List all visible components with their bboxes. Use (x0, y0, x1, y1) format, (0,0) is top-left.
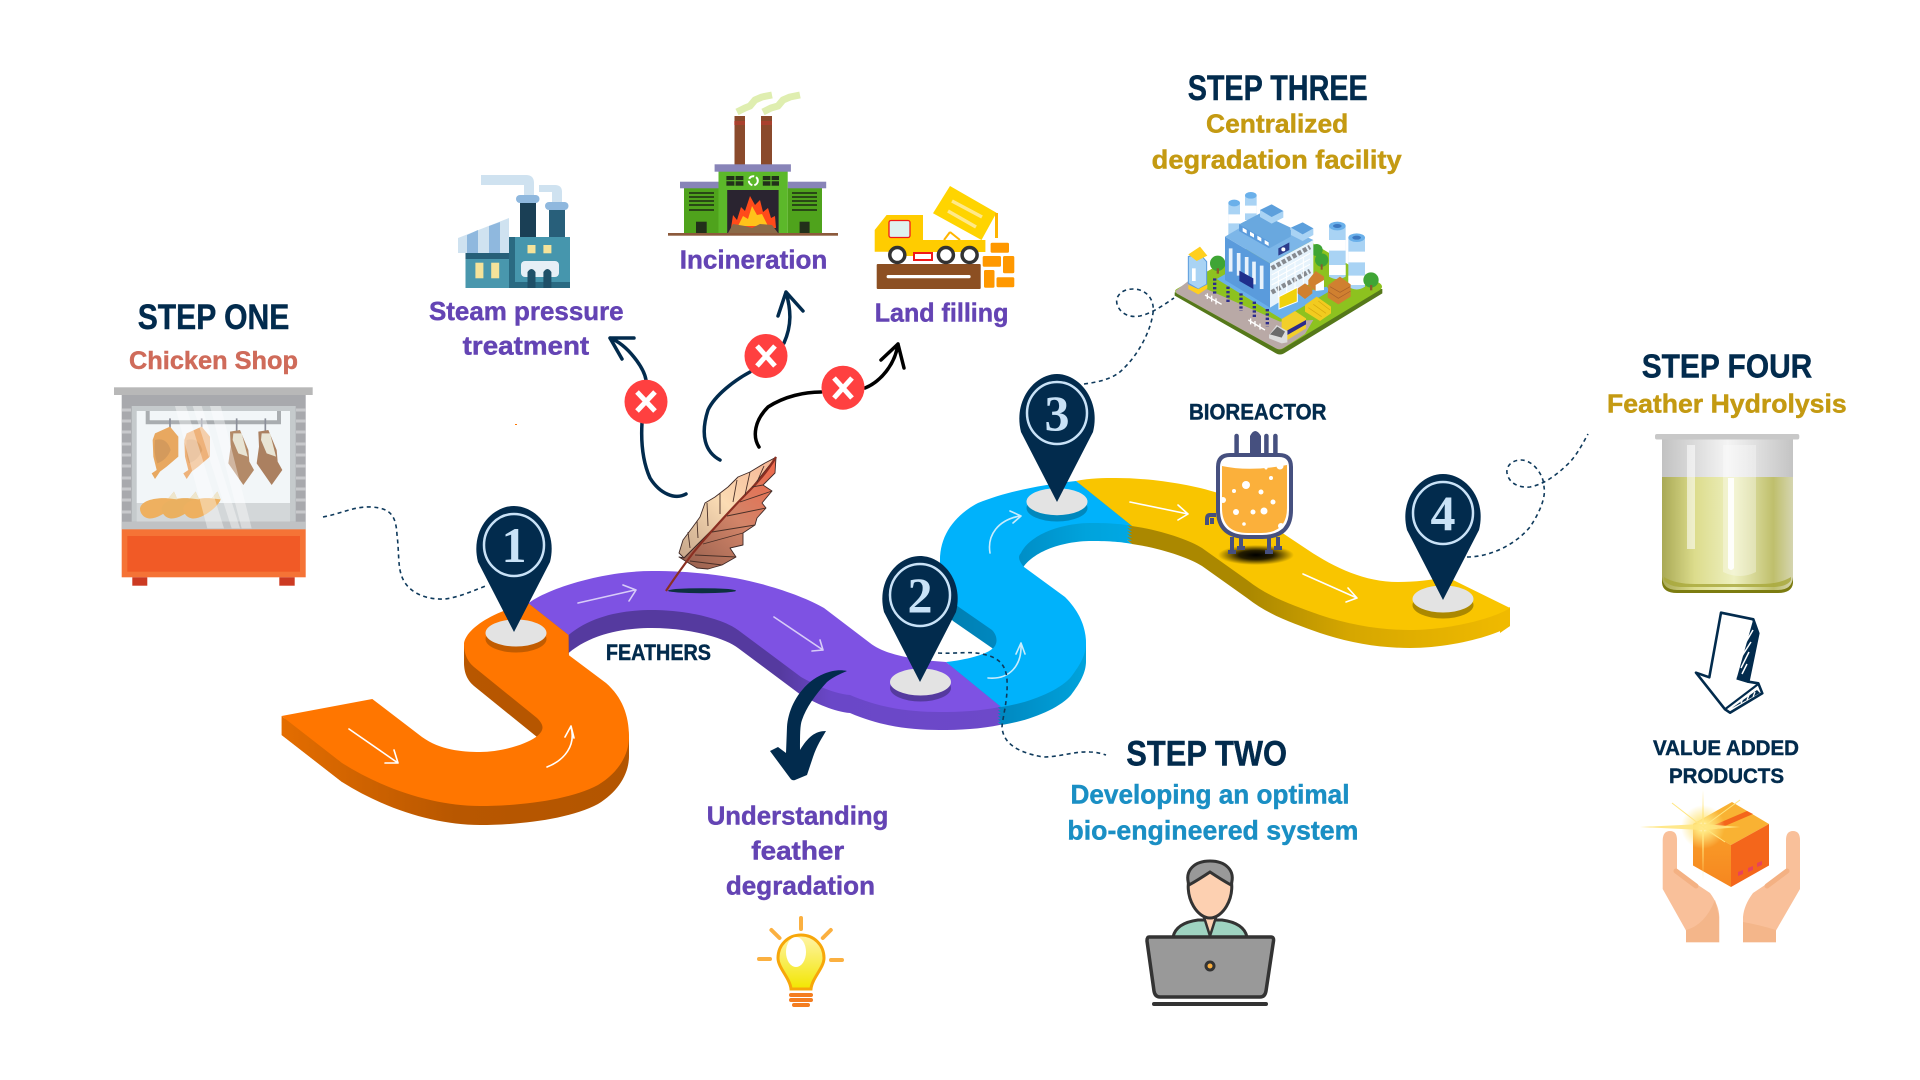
dotted connector: step four (1467, 434, 1588, 557)
icon: degradation facility (1175, 192, 1382, 354)
label: understanding feather degradation: Understanding (707, 800, 888, 830)
pin 3 (1019, 374, 1095, 522)
arrow: down to understanding (770, 670, 847, 780)
road: purple segment (528, 571, 1001, 730)
icon: bioreactor (1207, 431, 1294, 565)
icon: landfill truck (875, 186, 1014, 289)
label: understanding feather degradation: feather (751, 835, 844, 865)
arrow: feathers to incineration (704, 292, 803, 460)
arrow: feathers to land filling (755, 344, 904, 447)
label: understanding feather degradation: degradation (726, 870, 875, 900)
icon: beaker (1655, 434, 1799, 593)
label: value added products: VALUE ADDED (1653, 737, 1799, 760)
pin 1: 1 (502, 517, 526, 573)
label: value added products: PRODUCTS (1669, 765, 1784, 788)
label: incineration: Incineration (680, 244, 827, 274)
label: understanding feather degradation (707, 800, 888, 900)
heading: step four: STEP FOUR (1642, 348, 1812, 384)
icon: person with laptop (1147, 861, 1274, 1006)
heading: step one: STEP ONE (138, 298, 289, 337)
label: step two description: Developing an optimal (1070, 779, 1350, 809)
label: step two description (1067, 779, 1358, 845)
icon: box in hands (1640, 790, 1800, 942)
road: yellow segment (1076, 478, 1510, 648)
label: steam pressure treatment (429, 296, 624, 360)
arrow: feathers to steam pressure treatment (610, 338, 686, 496)
label: step three description (1152, 109, 1402, 174)
dotted connector: step one (323, 507, 488, 599)
road direction arrows (349, 502, 1357, 767)
label: bioreactor: BIOREACTOR (1189, 399, 1326, 424)
icon: steam factory (458, 175, 570, 288)
pin 2 (882, 556, 958, 702)
label: land filling: Land filling (875, 298, 1008, 328)
icon: feather (666, 457, 776, 593)
label: value added products (1653, 737, 1799, 788)
label: feather hydrolysis: Feather Hydrolysis (1607, 388, 1847, 418)
heading: step two: STEP TWO (1126, 735, 1287, 774)
label: chicken shop: Chicken Shop (129, 347, 298, 375)
label: steam pressure treatment: Steam pressure (429, 296, 624, 326)
label: steam pressure treatment: treatment (463, 330, 590, 360)
dotted connector: step two (938, 653, 1106, 757)
pin 2: 2 (908, 567, 932, 623)
icon: chicken shop (114, 387, 313, 586)
icon: incineration factory (668, 95, 838, 236)
pin 4 (1405, 474, 1481, 618)
heading: step three: STEP THREE (1188, 69, 1368, 108)
label: step two description: bio-engineered system (1067, 815, 1358, 845)
arrow: hollow sketched down arrow (1696, 613, 1762, 713)
label: step three description: degradation facility (1152, 144, 1402, 174)
pin 4: 4 (1430, 485, 1456, 541)
pin 1 (476, 506, 552, 652)
dotted connector: step three (1084, 289, 1174, 384)
pin 3: 3 (1044, 385, 1070, 441)
tiny orange mark (515, 424, 517, 425)
icon: red cross, land filling (822, 366, 864, 410)
road: blue segment (940, 481, 1132, 725)
road: orange segment (282, 603, 629, 825)
icon: red cross, steam pressure (624, 380, 668, 424)
label: step three description: Centralized (1206, 109, 1348, 139)
icon: light bulb (759, 918, 842, 1005)
label: feathers: FEATHERS (606, 640, 711, 665)
icon: red cross, incineration (744, 334, 788, 378)
